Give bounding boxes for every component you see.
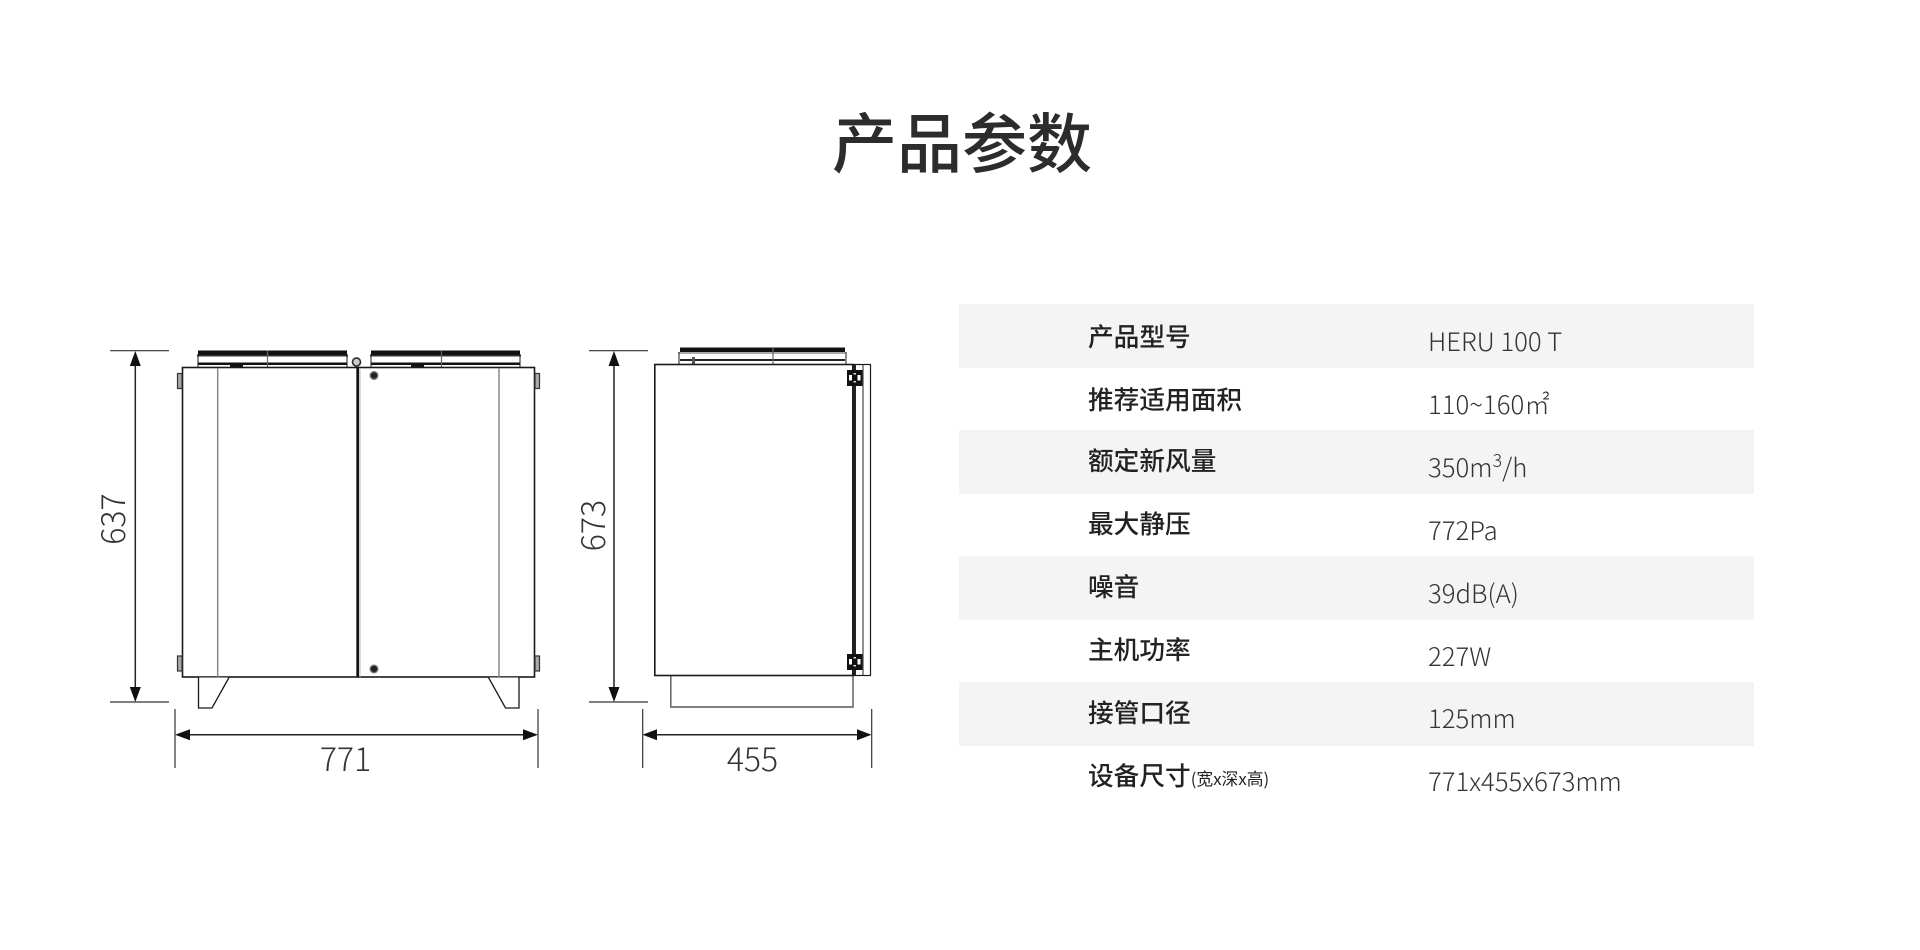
row: power: 主机功率 (1088, 630, 1191, 667)
row: airflow: 额定新风量 (1088, 441, 1216, 478)
label 771: 771 (320, 735, 371, 781)
row: static pressure: 772Pa (1428, 510, 1498, 548)
row: noise: 噪音 (1088, 567, 1139, 604)
row: static pressure: 最大静压 (1088, 504, 1191, 541)
row: power (1088, 630, 1491, 674)
legs (198, 678, 519, 708)
dimension: side depth (642, 709, 872, 781)
side duct collar (678, 348, 846, 364)
door lines (218, 367, 499, 677)
row: airflow: 350m3/h (1428, 446, 1527, 484)
row: noise: 39dB(A) (1428, 574, 1519, 610)
row: dimensions: 771x455x673mm (1428, 762, 1622, 798)
dimension: side height (569, 351, 648, 702)
side view unit (655, 348, 870, 707)
dimension: front width (175, 709, 538, 781)
left duct collar (197, 350, 348, 367)
label 673: 673 (569, 500, 615, 551)
row: area (1088, 380, 1550, 422)
side body (655, 364, 853, 676)
row: noise (1088, 567, 1519, 610)
row: static pressure (1088, 504, 1498, 548)
row: model (1088, 316, 1562, 358)
row: duct diameter: 接管口径 (1088, 693, 1191, 730)
right duct collar (370, 350, 521, 367)
row: power: 227W (1428, 636, 1491, 674)
screws (370, 372, 378, 673)
label 455: 455 (727, 735, 778, 781)
row: duct diameter: 125mm (1428, 698, 1516, 736)
spec table (959, 304, 1754, 798)
front view unit (178, 350, 540, 708)
row: duct diameter (1088, 693, 1516, 736)
cabinet body (182, 368, 534, 677)
row: area: 推荐适用面积 (1088, 380, 1242, 416)
side hinges (847, 370, 862, 670)
knob (352, 358, 360, 366)
row: model: 产品型号 (1088, 316, 1191, 354)
dimension: front height (89, 351, 169, 702)
row: area: 110~160㎡ (1428, 384, 1550, 422)
hinge tabs (178, 374, 540, 671)
row: dimensions (1088, 756, 1622, 798)
row: model: HERU 100 T (1428, 322, 1562, 358)
base (671, 676, 853, 707)
row: airflow (1088, 441, 1527, 484)
door edge (853, 364, 870, 676)
label 637: 637 (89, 493, 135, 545)
title: 产品参数 (832, 92, 1092, 186)
row: dimensions: 设备尺寸(宽x深x高) (1088, 756, 1269, 792)
